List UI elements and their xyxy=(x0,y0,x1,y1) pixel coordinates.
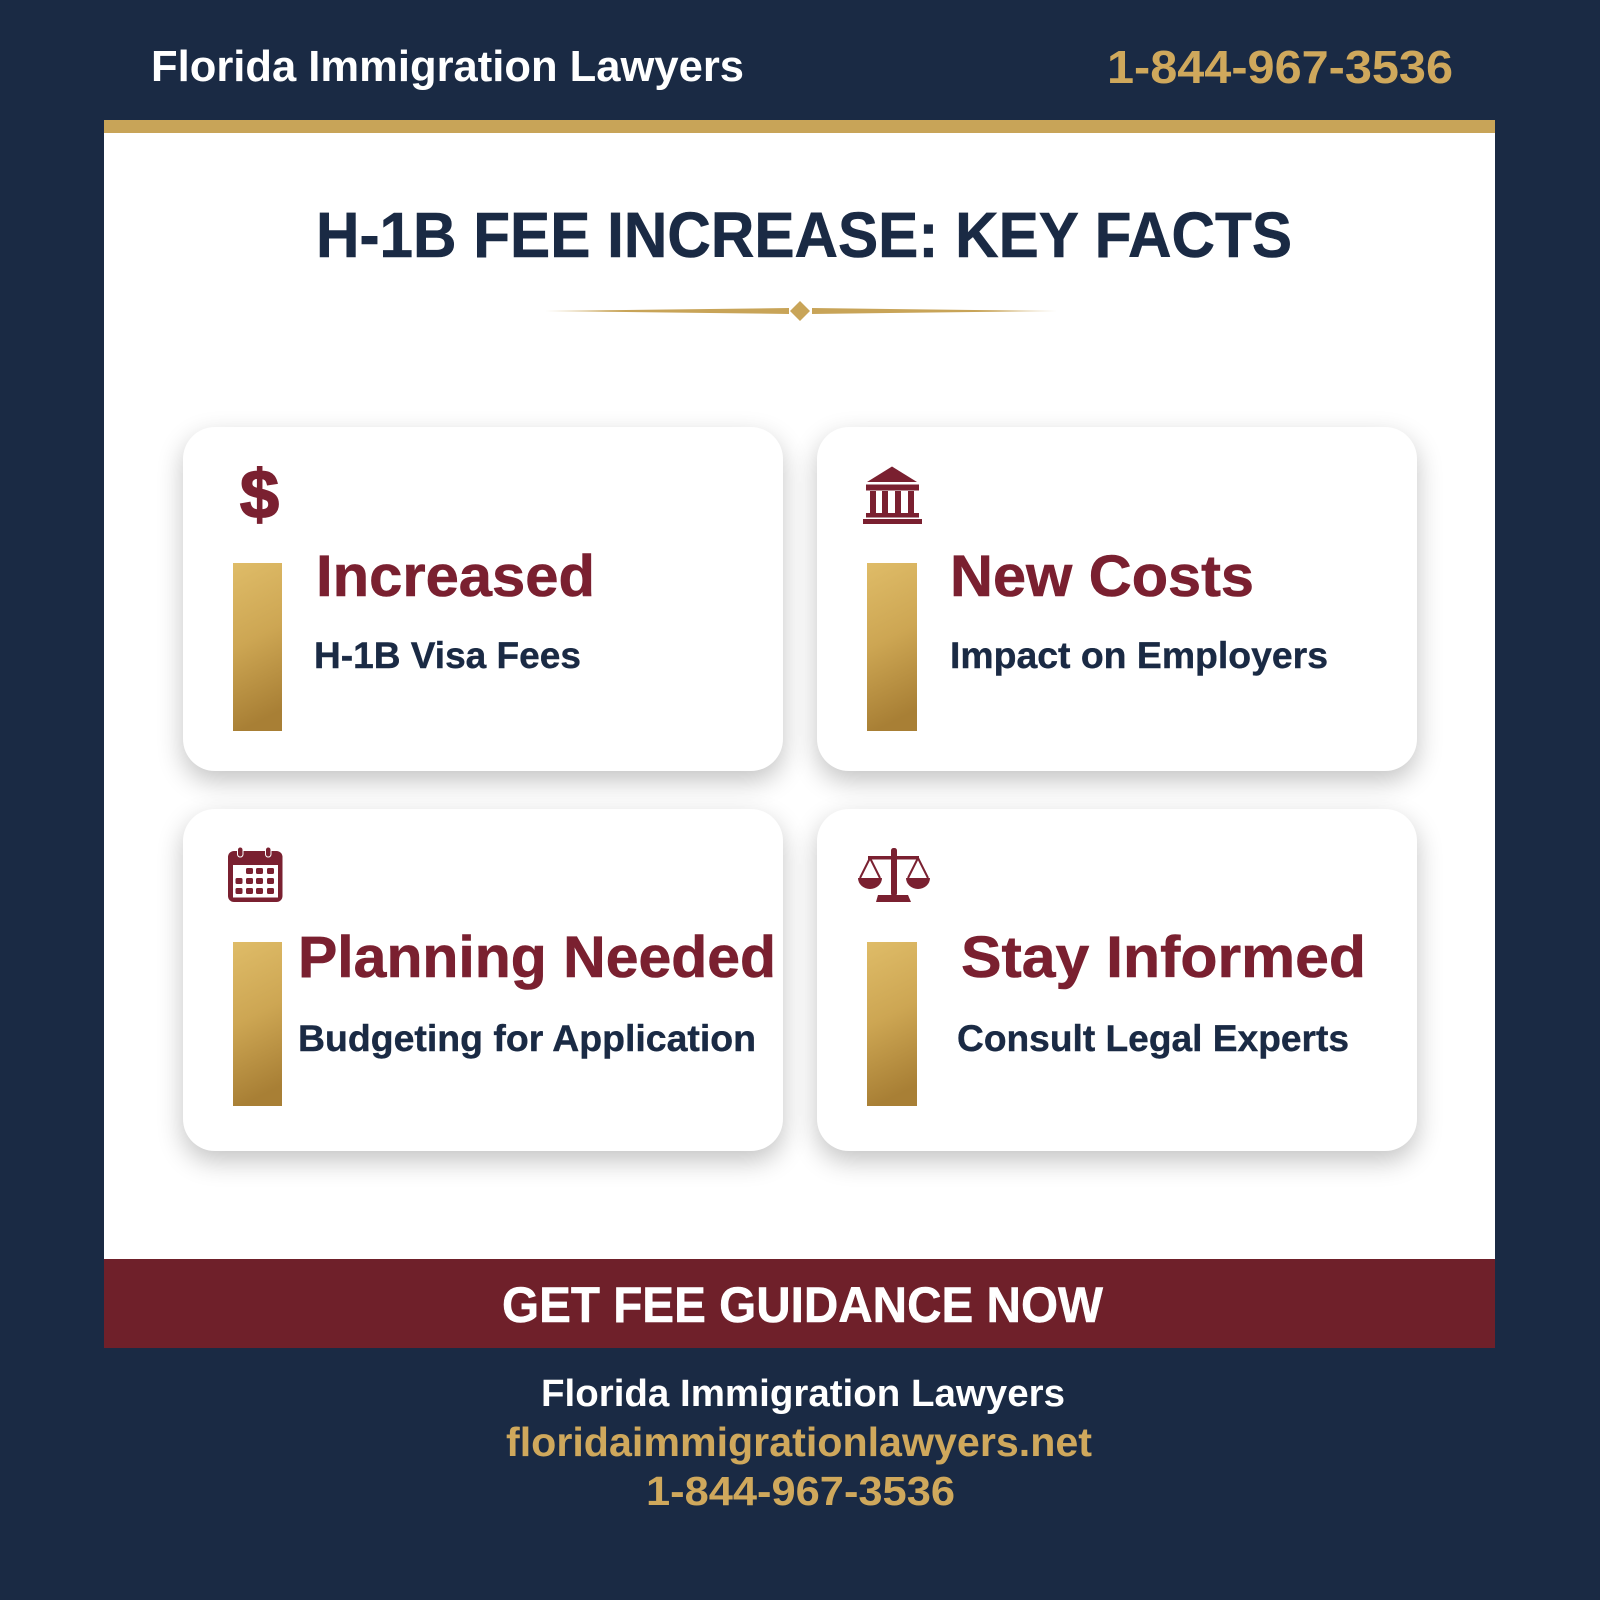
card subtext: Budgeting for Application xyxy=(298,1018,756,1059)
card subtext: Impact on Employers xyxy=(950,635,1328,676)
icon: dollar sign: $ xyxy=(240,456,279,533)
panel: New Costs xyxy=(817,427,1417,771)
title: H-1B FEE INCREASE: KEY FACTS xyxy=(316,199,1292,271)
call to action banner xyxy=(104,1259,1495,1348)
header phone number: 1-844-967-3536 xyxy=(1107,41,1453,93)
header bar xyxy=(151,41,1453,93)
gold bar xyxy=(233,563,282,731)
gold top rule xyxy=(104,120,1495,133)
card heading: Stay Informed xyxy=(961,925,1366,990)
card subtext: Consult Legal Experts xyxy=(957,1018,1349,1059)
icon: calendar xyxy=(228,847,282,902)
title divider with diamond xyxy=(548,301,1054,321)
footer phone: 1-844-967-3536 xyxy=(646,1468,955,1514)
gold bar xyxy=(867,563,917,731)
header firm name: Florida Immigration Lawyers xyxy=(151,42,744,91)
card heading: Planning Needed xyxy=(298,925,776,990)
gold bar xyxy=(233,942,282,1106)
footer website: floridaimmigrationlawyers.net xyxy=(506,1419,1092,1465)
panel: Increased xyxy=(183,427,783,771)
footer contact block xyxy=(506,1373,1092,1514)
call to action banner: GET FEE GUIDANCE NOW xyxy=(502,1277,1104,1333)
panel: Planning Needed xyxy=(183,809,783,1151)
card subtext: H-1B Visa Fees xyxy=(314,635,581,676)
icon: scales of justice xyxy=(858,848,930,902)
footer firm name: Florida Immigration Lawyers xyxy=(541,1373,1065,1415)
card heading: Increased xyxy=(316,544,595,609)
main white panel xyxy=(104,120,1495,1348)
card heading: New Costs xyxy=(950,544,1254,609)
icon: bank building xyxy=(863,466,922,524)
gold bar xyxy=(867,942,917,1106)
panel: Stay Informed xyxy=(817,809,1417,1151)
